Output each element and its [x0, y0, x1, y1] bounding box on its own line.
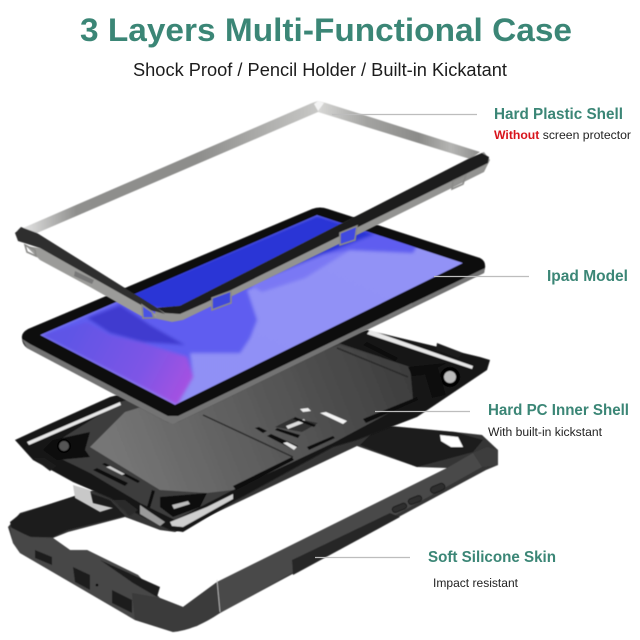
layer: soft silicone skin: [8, 425, 498, 632]
slit near mount: [147, 490, 155, 508]
title: 3 Layers Multi-Functional Case: [80, 12, 572, 48]
corner highlight: [314, 101, 324, 111]
textured grip: [292, 513, 400, 575]
silver rim near right: [153, 152, 490, 322]
label: soft silicone skin: [428, 549, 556, 590]
hairline seam: [217, 580, 220, 612]
ports near edge: [33, 458, 57, 471]
layer: ipad model: [22, 208, 485, 424]
leader line: inner shell: [375, 410, 470, 412]
hand strap mount left: [43, 432, 90, 460]
pen holder: [436, 343, 463, 358]
clips: [25, 175, 466, 318]
panel seam lines: [203, 348, 408, 457]
layer: hard plastic shell: [15, 101, 490, 322]
label: soft silicone skin: Soft Silicone Skin: [428, 549, 556, 566]
label: hard pc inner shell: Hard PC Inner Shell: [488, 402, 629, 419]
label: soft silicone skin: Impact resistant: [433, 576, 519, 590]
leader line: ipad model: [434, 276, 529, 278]
label: hard pc inner shell: [488, 402, 629, 439]
leader line: silicone skin: [315, 556, 410, 558]
silver band far left: [16, 101, 318, 233]
leader line: hard plastic shell: [332, 114, 477, 116]
tablet screen: [40, 215, 463, 405]
kickstand: [255, 408, 347, 450]
subtitle: Shock Proof / Pencil Holder / Built-in Kickatant: [133, 60, 507, 80]
inner shell body: [15, 330, 490, 532]
side ports: [388, 303, 413, 318]
hand strap mount right: [442, 369, 458, 385]
chrome strip far left: [27, 402, 121, 445]
dark strip near right: [157, 153, 489, 314]
silver band far right: [318, 101, 480, 159]
port cutouts: [35, 550, 52, 565]
dark band near left: [15, 227, 165, 314]
end clip: [100, 560, 160, 597]
chrome near-side clutter: [73, 485, 113, 512]
hand strap mount bottom: [160, 493, 207, 517]
corner bumper bottom: [132, 582, 220, 632]
inner shell margin: [43, 340, 413, 520]
side button cover: [74, 271, 94, 284]
tablet body: [22, 208, 485, 423]
chrome strip far right: [367, 330, 473, 369]
recess window: [440, 435, 463, 447]
wallpaper waves: [40, 215, 420, 405]
label: ipad model: Ipad Model: [547, 268, 628, 285]
label: hard pc inner shell: With built-in kickstant: [488, 425, 603, 439]
corner bumper right: [473, 447, 498, 467]
label: hard plastic shell: Hard Plastic Shell: [494, 106, 623, 123]
silicone outer body: [8, 425, 498, 632]
far wall kickstand recess: [360, 425, 483, 467]
tablet metal edge: [22, 268, 485, 424]
side slits: [233, 457, 294, 490]
chrome bottom edge: [170, 494, 233, 527]
long side rail: [217, 453, 482, 613]
label: hard plastic shell: Without screen protector: [494, 128, 631, 142]
strap slots: [93, 468, 128, 486]
silver rim near left: [26, 246, 157, 317]
near end rail: [10, 527, 160, 620]
side buttons: [391, 482, 446, 513]
layer: hard PC inner shell: [15, 330, 490, 532]
inner shell back panel: [90, 345, 413, 493]
label: hard plastic shell: [494, 106, 631, 142]
left far wall: [10, 492, 125, 537]
